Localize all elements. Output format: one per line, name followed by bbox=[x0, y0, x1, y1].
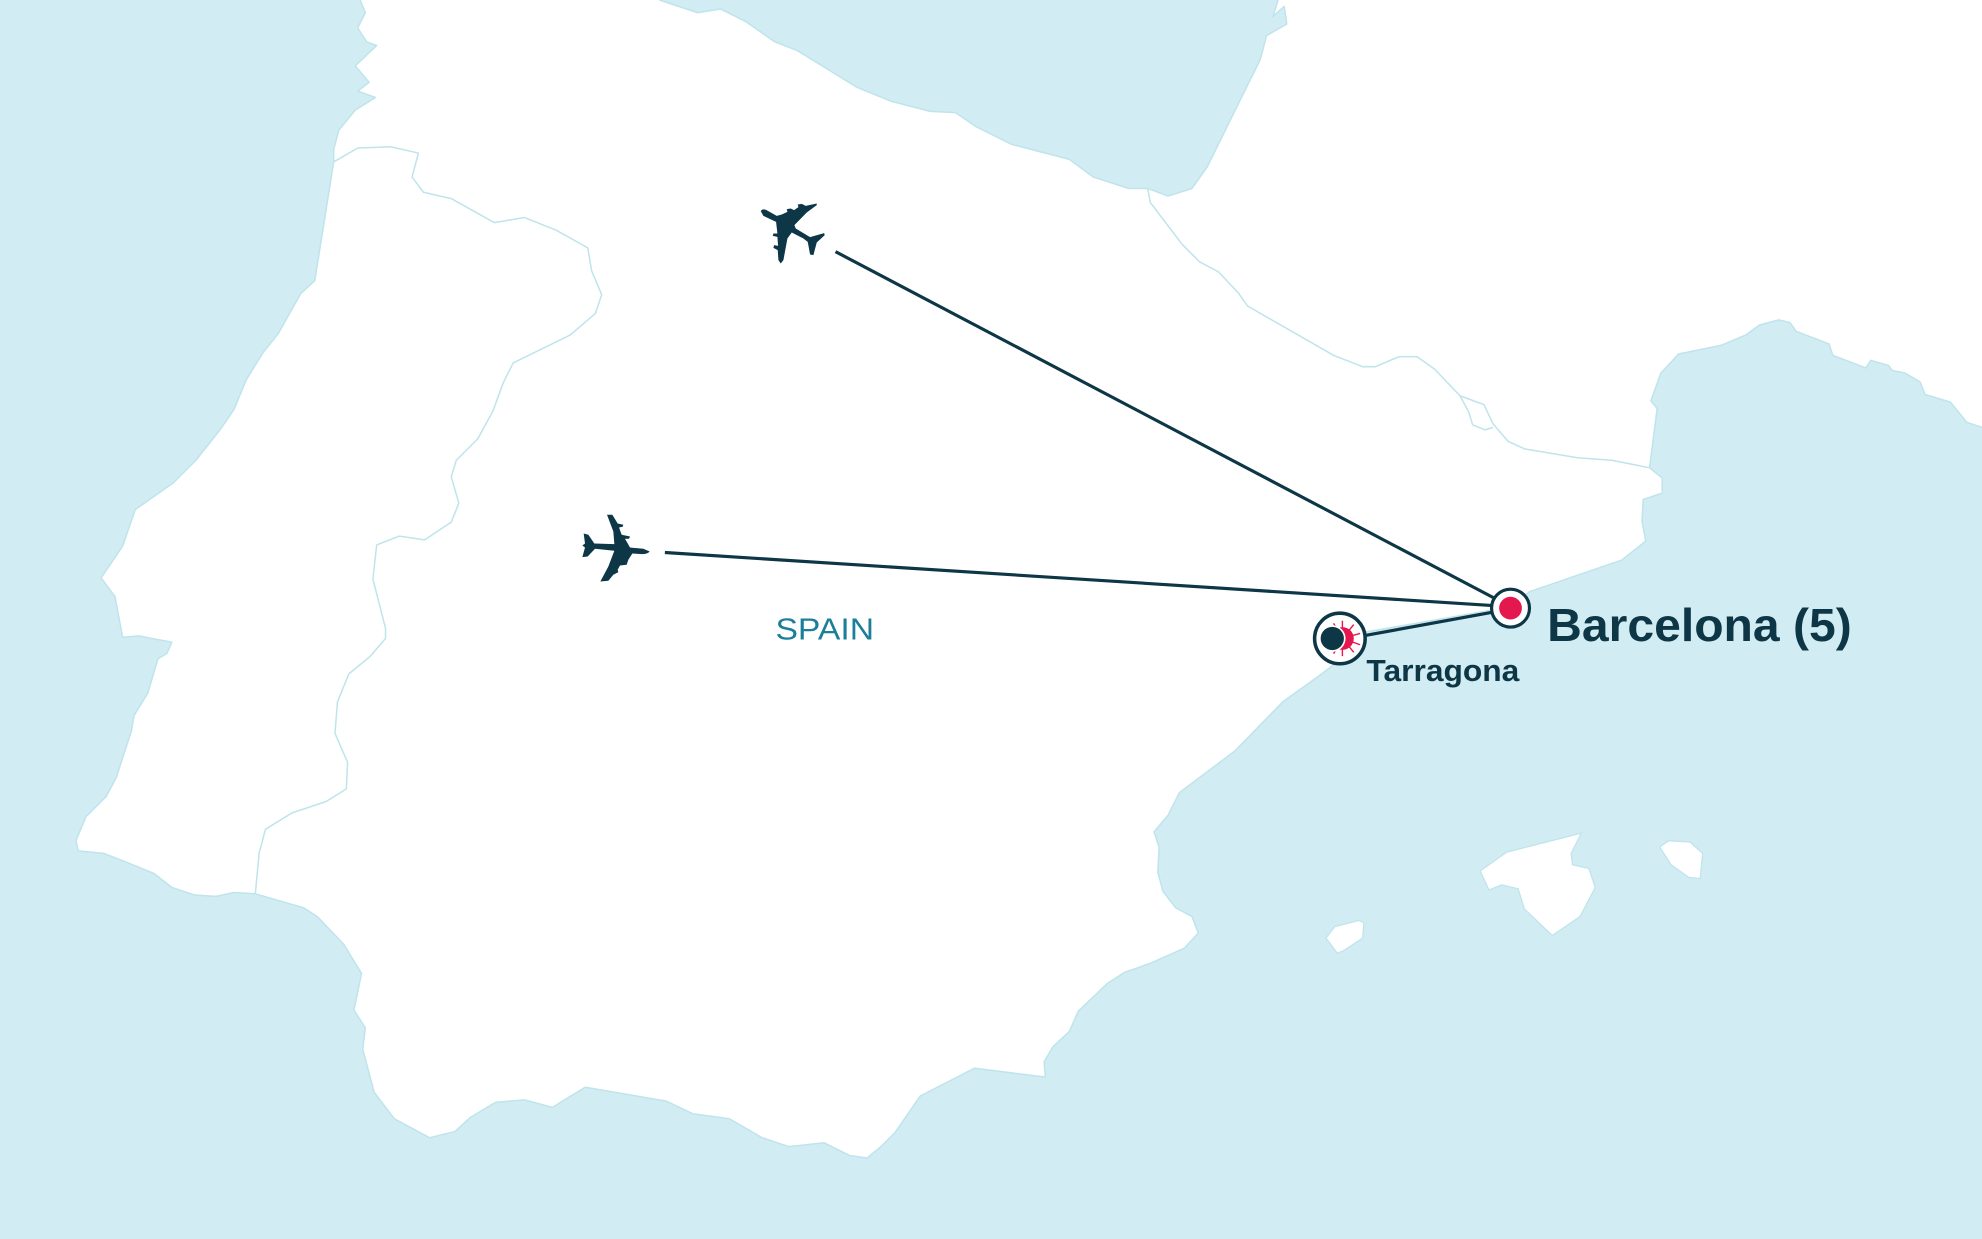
marker: Barcelona bbox=[1492, 589, 1529, 627]
island: Ibiza bbox=[1326, 920, 1364, 953]
country label: Spain: SPAIN bbox=[775, 612, 874, 647]
label: Tarragona: Tarragona bbox=[1366, 655, 1521, 688]
border: Portugal and Spain bbox=[255, 147, 602, 894]
flight route: lower plane to Barcelona bbox=[665, 553, 1493, 606]
border: Andorra bbox=[1460, 396, 1493, 430]
icon: upper airplane bbox=[761, 203, 825, 263]
route: Tarragona to Barcelona bbox=[1363, 612, 1494, 636]
border: France and Spain bbox=[1148, 188, 1650, 468]
island: Menorca bbox=[1660, 841, 1703, 879]
flight route: upper plane to Barcelona bbox=[836, 252, 1494, 598]
label: Barcelona (5): Barcelona (5) bbox=[1547, 599, 1852, 651]
marker: Tarragona bbox=[1315, 613, 1365, 664]
island: Mallorca bbox=[1480, 833, 1595, 936]
icon: lower airplane bbox=[582, 515, 650, 581]
